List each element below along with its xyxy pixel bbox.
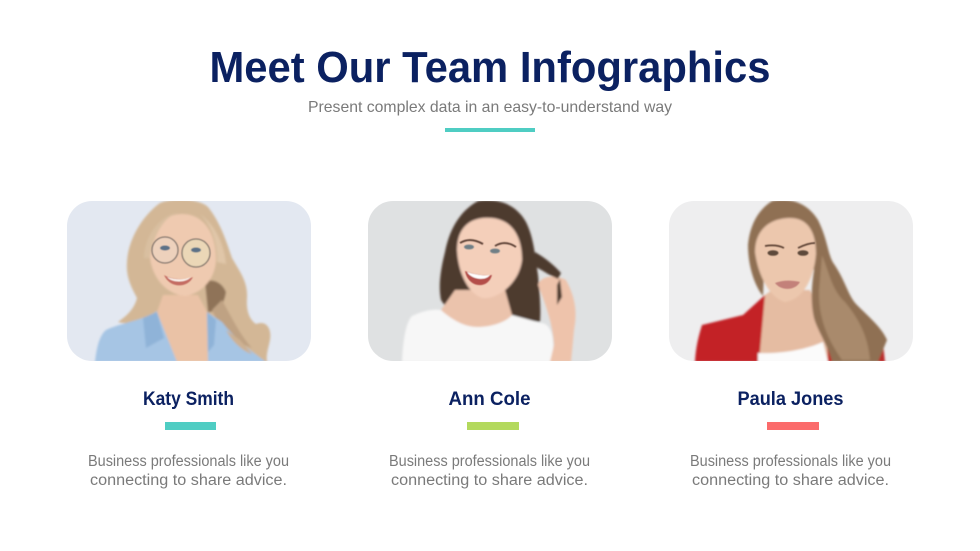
description: Katy Smith — [88, 453, 289, 489]
description: Ann Cole: connecting to share advice. — [391, 472, 588, 489]
description: Paula Jones — [690, 453, 891, 489]
photo: Paula Jones — [669, 200, 913, 362]
accent bar: green — [467, 422, 519, 430]
description: Ann Cole — [389, 453, 590, 489]
accent bar: teal — [165, 422, 216, 430]
panel: Katy Smith — [67, 200, 311, 489]
description: Katy Smith: Business professionals like you — [88, 453, 289, 470]
name: Katy Smith: Katy Smith — [143, 389, 234, 410]
title accent bar — [445, 128, 535, 132]
description: Paula Jones: connecting to share advice. — [692, 472, 889, 489]
description: Katy Smith: connecting to share advice. — [90, 472, 287, 489]
accent bar: coral — [767, 422, 819, 430]
description: Paula Jones: Business professionals like you — [690, 453, 891, 470]
panel: Paula Jones — [669, 200, 913, 489]
name: Paula Jones: Paula Jones — [738, 389, 844, 410]
name: Ann Cole: Ann Cole — [448, 389, 530, 410]
photo: Ann Cole — [368, 200, 612, 362]
title: Meet Our Team Infographics — [210, 43, 770, 92]
panel: Ann Cole — [368, 200, 612, 489]
photo: Katy Smith — [67, 200, 311, 362]
subtitle: Present complex data in an easy-to-understand way — [308, 99, 672, 116]
description: Ann Cole: Business professionals like you — [389, 453, 590, 470]
